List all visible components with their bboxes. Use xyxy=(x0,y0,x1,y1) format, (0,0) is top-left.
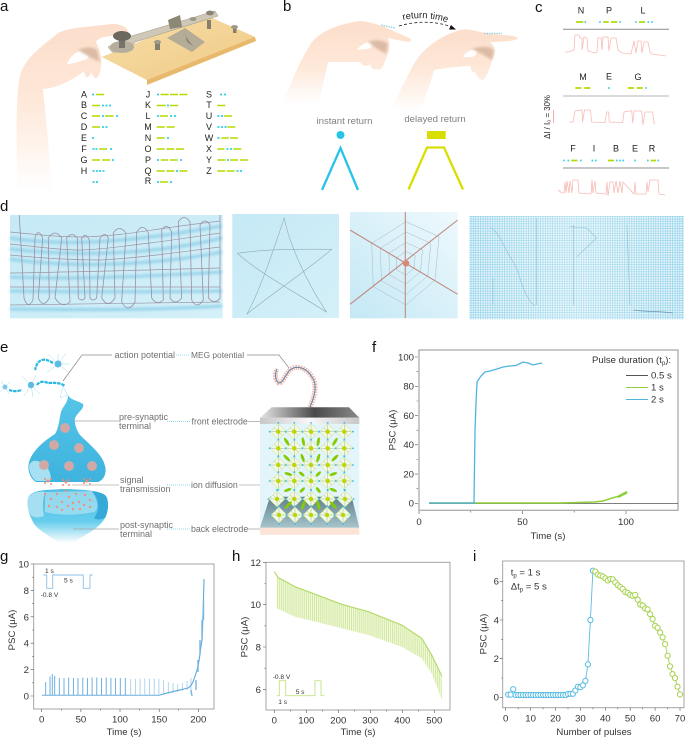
annotation xyxy=(511,568,547,594)
Morse code table: Q xyxy=(144,166,152,176)
panel a: hand on Morse key and code table xyxy=(0,0,256,190)
Morse code table: H xyxy=(81,166,87,176)
panel b: instant and delayed return gestures xyxy=(283,0,518,190)
pulse data xyxy=(274,572,442,700)
axis tick labels: 0 xyxy=(494,692,499,704)
Morse code table: Y xyxy=(206,155,212,165)
axis tick labels: 8 xyxy=(24,586,29,597)
axis tick labels xyxy=(398,352,634,528)
axis tick labels: 200 xyxy=(190,714,206,726)
axis tick labels: 0 xyxy=(39,714,44,726)
axis tick labels: 80 xyxy=(403,382,414,392)
legend: Pulse duration (t xyxy=(592,355,662,366)
inset: pulse waveform: -0.8 V xyxy=(273,674,291,681)
label e: e xyxy=(0,339,8,356)
panel e: biological synapse vs MEG device xyxy=(0,339,359,543)
row: F I B E R: I xyxy=(593,144,595,154)
Morse code table: J xyxy=(146,90,150,100)
chart frame xyxy=(263,562,450,713)
Morse code table: C xyxy=(81,111,88,121)
axis tick labels: 0 xyxy=(272,716,277,726)
Morse code table: B xyxy=(81,100,87,110)
legend: 1 s xyxy=(651,382,664,394)
Morse code table: S xyxy=(206,90,212,100)
label h: h xyxy=(232,548,240,565)
chart frame xyxy=(500,561,684,711)
Morse code table: O xyxy=(144,144,152,154)
axis titles: Time (s) xyxy=(531,531,565,542)
Morse code table: P xyxy=(145,155,151,165)
axis tick labels: 4 xyxy=(24,638,30,650)
row: F I B E R xyxy=(558,144,669,196)
illustration: left hand xyxy=(283,21,411,104)
text: device labels xyxy=(191,350,248,534)
Morse code table: G xyxy=(80,155,88,165)
perovskite lattice xyxy=(268,422,354,525)
Morse code table: X xyxy=(206,144,212,154)
Morse code table: M xyxy=(144,122,152,132)
axis tick labels: 40 xyxy=(600,714,611,724)
Morse code table: W xyxy=(205,133,214,143)
illustration: MEG device stack xyxy=(260,407,359,535)
row: M E G xyxy=(563,72,669,125)
axis tick labels: 60 xyxy=(650,714,660,724)
row: N P L xyxy=(563,6,669,56)
illustration: post-synaptic terminal xyxy=(28,489,108,543)
axis tick labels: 300 xyxy=(362,716,378,726)
axis titles: PSC (μA) xyxy=(478,614,490,654)
Morse code table: A xyxy=(81,90,87,100)
axis tick labels: 12 xyxy=(250,558,261,569)
panel f: PSC vs time for pulse durations xyxy=(372,339,678,542)
inset: pulse waveform: 5 s xyxy=(64,578,73,584)
axis tick labels xyxy=(250,558,442,726)
axis tick labels: 60 xyxy=(403,411,414,422)
illustration: pre-synaptic terminal xyxy=(28,395,106,482)
axis titles: PSC (μA) xyxy=(7,610,18,650)
axis tick labels: 30 xyxy=(575,714,586,724)
axis tick labels: 50 xyxy=(76,714,86,726)
row: N P L: L xyxy=(640,6,646,16)
axis titles xyxy=(478,614,632,737)
panel c: spelling NPL, MEG, FIBER xyxy=(535,0,669,196)
icon: instant return dot and peak xyxy=(322,131,358,190)
row: M E G: G xyxy=(634,72,642,82)
axis tick labels: 20 xyxy=(550,714,561,724)
annotation: Δt xyxy=(511,582,520,592)
Morse code table: D xyxy=(81,122,88,132)
arrow: return time xyxy=(398,12,456,30)
arrow: return time: return time xyxy=(402,12,448,22)
Morse code table: E xyxy=(81,133,87,143)
axis tick labels: 100 xyxy=(298,716,314,726)
inset: pulse waveform xyxy=(41,568,93,599)
axis tick labels: 2 xyxy=(494,654,499,665)
Morse code table: R xyxy=(145,176,152,186)
data curves xyxy=(429,362,678,504)
text: biology labels: terminal xyxy=(120,529,152,539)
photo: star xyxy=(232,214,339,318)
axis tick labels: 500 xyxy=(426,716,442,726)
Morse code table: V xyxy=(206,122,212,132)
text: delayed return: delayed return xyxy=(404,114,466,125)
label f: f xyxy=(372,339,377,356)
annotation: = 5 s xyxy=(523,582,547,592)
axis tick labels xyxy=(494,576,685,724)
axis tick labels: 2 xyxy=(24,665,29,676)
pulse data xyxy=(42,579,204,696)
label i: i xyxy=(473,548,476,565)
Morse code table: U xyxy=(206,111,212,121)
axis tick labels: 6 xyxy=(256,685,261,696)
row: M E G: E xyxy=(606,72,612,82)
inset: pulse waveform: 1 s xyxy=(278,699,288,706)
leader lines xyxy=(63,355,289,529)
row: N P L: N xyxy=(578,6,584,16)
inset: pulse waveform xyxy=(273,674,324,706)
inset: pulse waveform: -0.8 V xyxy=(41,592,59,599)
axis tick labels: 50 xyxy=(517,517,528,528)
row: F I B E R: B xyxy=(613,144,619,154)
axis tick labels: 50 xyxy=(625,714,636,724)
text: biology labels: terminal xyxy=(119,421,151,431)
chart frame xyxy=(31,564,214,712)
axis tick labels: 10 xyxy=(250,600,261,611)
text: biology labels: signal xyxy=(120,475,144,485)
icon: delayed return bar and plateau xyxy=(408,131,463,190)
axis titles: PSC (μA) xyxy=(240,617,250,657)
y-scale label: ΔI / I₀ = 30% xyxy=(543,95,552,139)
axis tick labels: 4 xyxy=(494,616,500,626)
text: device labels: back electrode xyxy=(191,524,248,534)
row: M E G: M xyxy=(579,72,587,82)
axis tick labels: 100 xyxy=(398,352,414,364)
Morse code table: T xyxy=(206,100,212,110)
text: device labels: MEG potential xyxy=(191,350,244,360)
axis tick labels: 400 xyxy=(394,716,410,726)
illustration: right hand xyxy=(390,29,518,112)
axis tick labels: 0 xyxy=(409,498,414,510)
illustration: released neurotransmitters xyxy=(44,478,91,486)
scale bar xyxy=(552,110,554,123)
inset: pulse waveform: 1 s xyxy=(45,568,54,575)
axis tick labels: 0 xyxy=(503,714,508,724)
axis tick labels xyxy=(18,560,206,726)
text: biology labels: action potential xyxy=(114,350,175,360)
Morse code table: L xyxy=(145,111,151,121)
Morse code table: K xyxy=(145,100,151,110)
photo: spider web xyxy=(350,212,458,318)
legend: 0.5 s xyxy=(651,370,672,382)
panel i: PSC vs number of pulses xyxy=(473,548,685,737)
row: F I B E R: R xyxy=(649,144,656,154)
Morse code table: Z xyxy=(206,166,212,176)
axis titles xyxy=(240,617,375,737)
label d: d xyxy=(0,198,8,215)
label g: g xyxy=(0,548,8,565)
legend xyxy=(592,355,672,406)
axis titles: PSC (μA) xyxy=(388,410,398,450)
panel h: PSC depression xyxy=(232,548,450,737)
axis tick labels: 6 xyxy=(494,576,499,588)
axis tick labels: 100 xyxy=(112,714,128,726)
inset: pulse waveform: 5 s xyxy=(296,689,305,696)
illustration: Morse telegraph key xyxy=(102,11,256,85)
annotation: p xyxy=(513,574,517,580)
axis tick labels: 8 xyxy=(256,642,261,654)
text: biology labels: pre-synaptic xyxy=(119,412,169,422)
axis tick labels: 10 xyxy=(18,560,29,570)
data: depression series xyxy=(595,572,680,694)
legend: p xyxy=(662,361,666,367)
axis tick labels: 40 xyxy=(403,440,414,451)
axis tick labels: 100 xyxy=(618,517,634,528)
illustration: MEG fibre xyxy=(276,367,315,407)
Morse code table: F xyxy=(81,144,87,154)
annotation: t xyxy=(511,568,513,578)
row: F I B E R: F xyxy=(570,144,576,154)
text: biology labels xyxy=(114,350,175,539)
illustration: neurons xyxy=(0,353,70,398)
annotation: = 1 s xyxy=(517,568,541,578)
axis tick labels: 200 xyxy=(330,716,346,726)
row: N P L: P xyxy=(606,6,612,16)
illustration: arm and hand xyxy=(17,24,128,190)
axis tick labels: 0 xyxy=(416,517,422,528)
legend: 2 s xyxy=(651,394,664,406)
text: device labels: front electrode xyxy=(192,416,248,426)
Morse code table xyxy=(80,90,248,186)
axis tick labels: 0 xyxy=(24,692,29,702)
axis titles xyxy=(388,410,565,542)
panel d: woven fibre photographs xyxy=(0,198,684,319)
text: device labels: ion diffusion xyxy=(191,480,238,490)
axis titles xyxy=(7,610,141,737)
data: potentiation series xyxy=(508,571,593,695)
legend: ): xyxy=(665,355,671,366)
axis tick labels: 150 xyxy=(151,714,167,726)
axis tick labels: 6 xyxy=(24,612,29,624)
text: biology labels: transmission xyxy=(120,484,171,494)
chart frame xyxy=(415,350,678,514)
text: instant return: instant return xyxy=(316,116,372,127)
axis tick labels: 20 xyxy=(403,470,414,480)
annotation: p xyxy=(520,588,524,594)
Morse code table: N xyxy=(145,133,151,143)
text: biology labels: post-synaptic xyxy=(120,520,174,530)
panel g: PSC potentiation with 1 s pulses xyxy=(0,548,214,737)
photo: mesh fabric with writing xyxy=(469,216,684,319)
row: F I B E R: E xyxy=(632,144,638,154)
axis tick labels: 10 xyxy=(525,714,536,724)
photo: serpentine weave xyxy=(10,215,223,318)
